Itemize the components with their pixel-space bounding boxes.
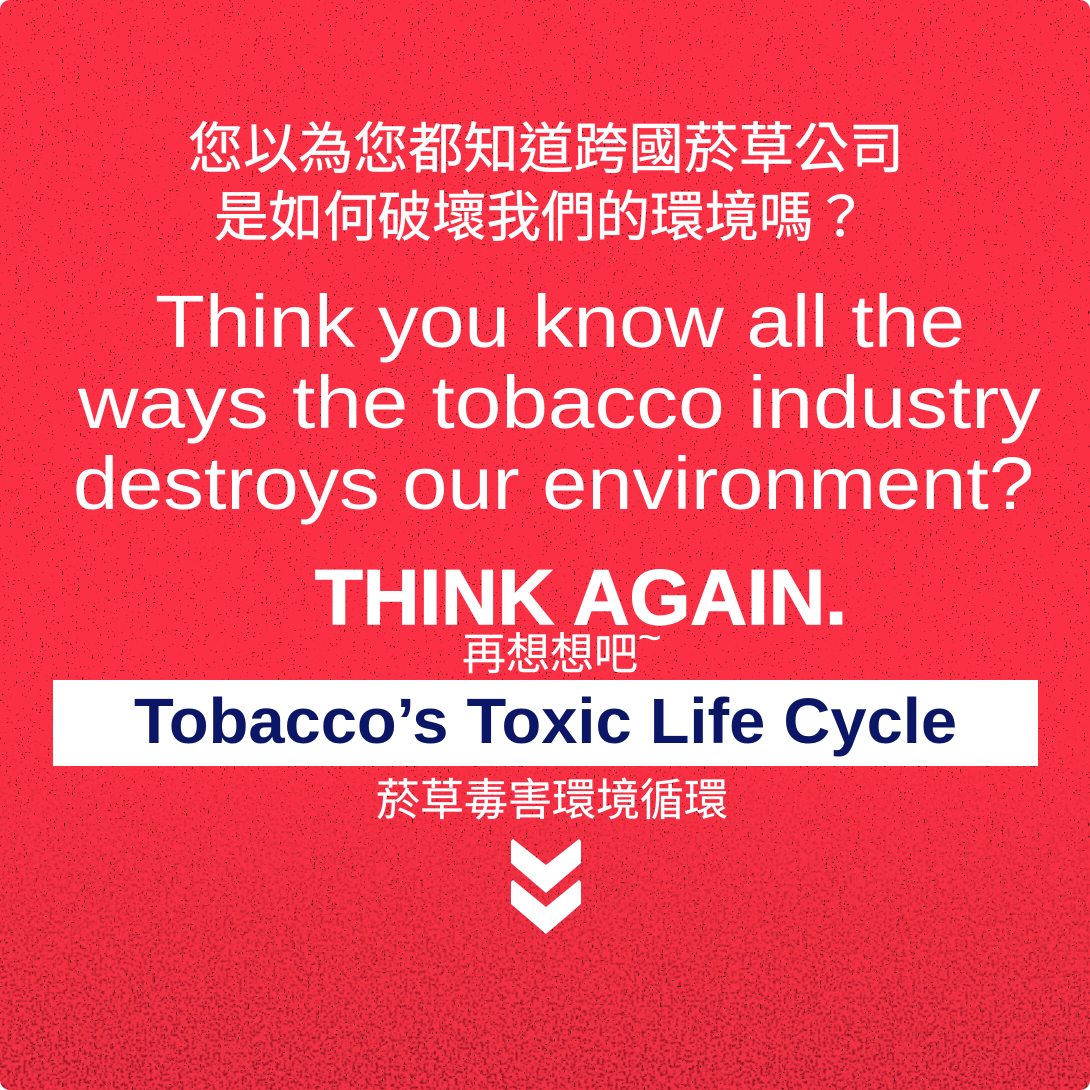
- callout: Chinese think again: ~: [638, 616, 661, 660]
- caption: Chinese life cycle: 菸草毒害環境循環: [376, 776, 728, 825]
- callout: THINK AGAIN: THINK AGAIN.: [315, 553, 847, 641]
- banner: Tobacco's Toxic Life Cycle: [53, 680, 1038, 766]
- heading: English question: destroys our environment?: [73, 442, 1034, 525]
- callout: Chinese think again: 再想想吧: [462, 630, 638, 679]
- heading: English question: ways the tobacco industry: [77, 361, 1041, 444]
- heading: English question: Think you know all the: [155, 280, 965, 363]
- icon: double chevron down arrow: [511, 839, 581, 934]
- banner: Tobacco's Toxic Life Cycle: Tobacco’s Toxic Life Cycle: [134, 685, 957, 757]
- heading: English question: [73, 280, 1041, 525]
- heading: Chinese question: 您以為您都知道跨國菸草公司: [188, 118, 904, 180]
- heading: Chinese question: 是如何破壞我們的環境嗎？: [214, 187, 868, 248]
- heading: Chinese question: [188, 118, 904, 248]
